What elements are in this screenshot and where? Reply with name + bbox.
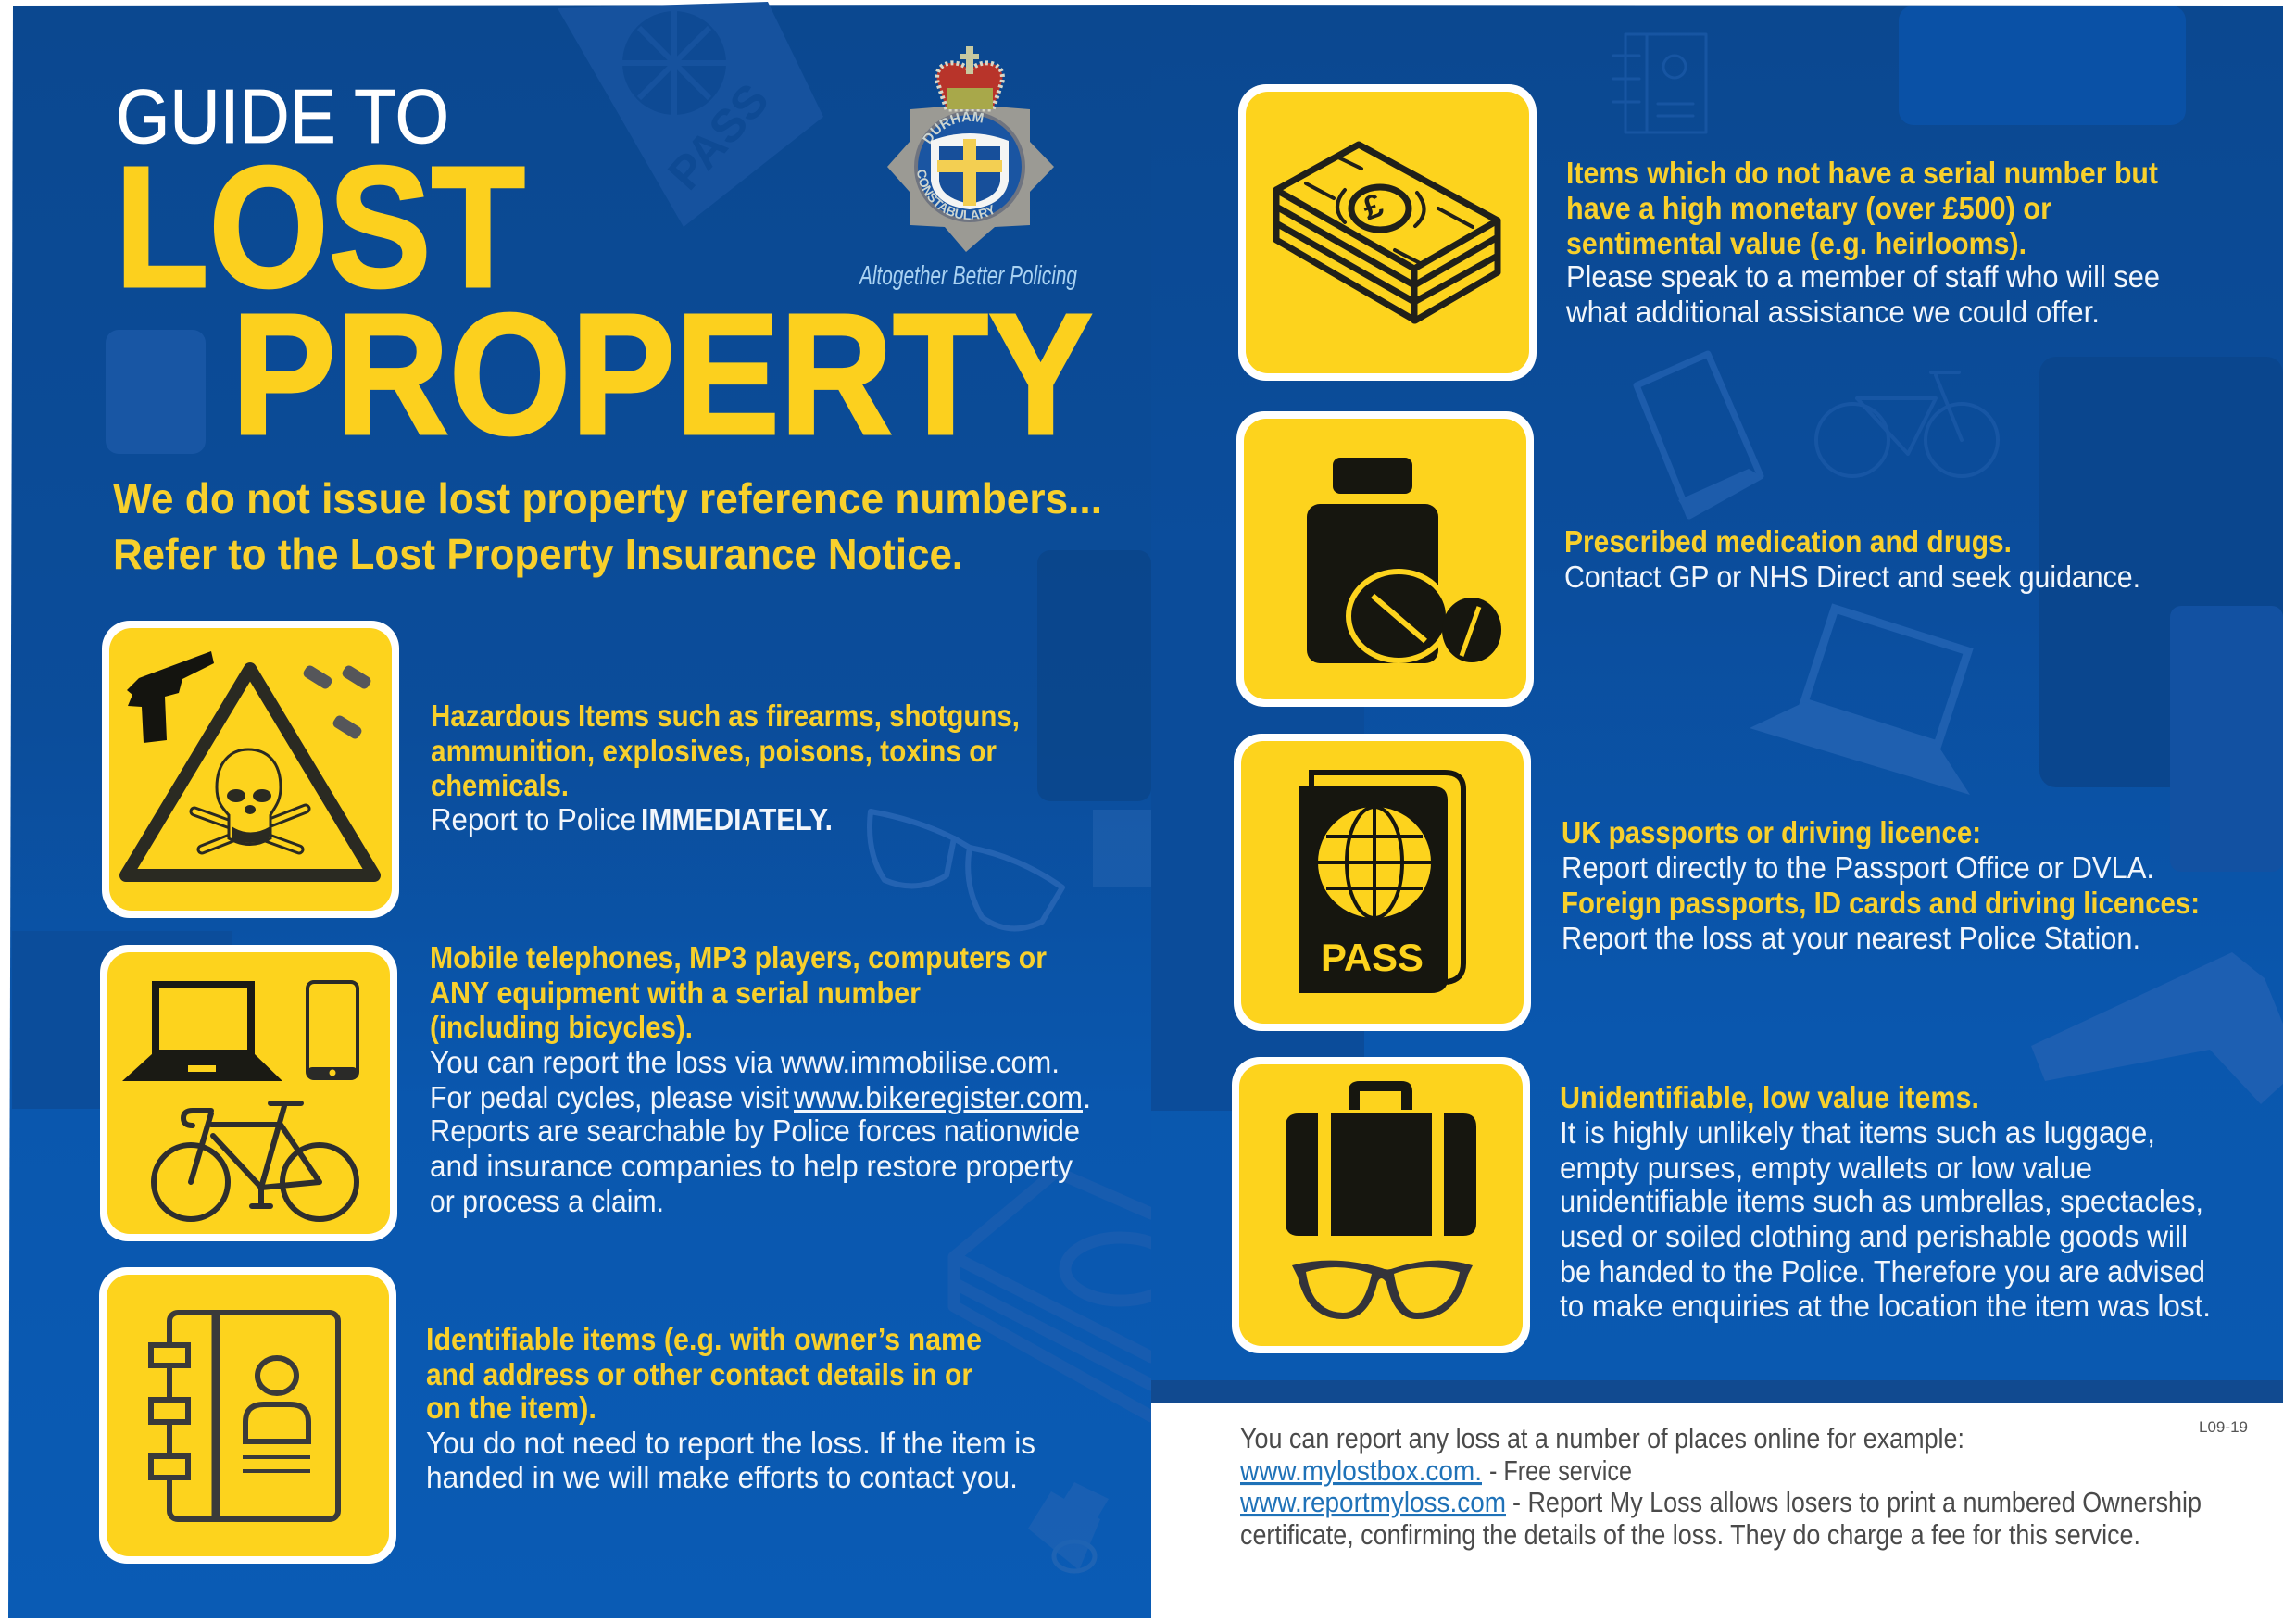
logo: Durham Constabulary crest: CONSTABULARY <box>917 170 993 220</box>
footer: online reporting note <box>1239 1422 2202 1551</box>
banknote stack <box>1276 145 1498 321</box>
icon: background phone <box>1637 354 1761 516</box>
text: high value items: Items which do not have a serial number but <box>1566 156 2158 190</box>
text: identifiable items <box>426 1322 1035 1494</box>
icon tile: electronics and bicycles <box>100 945 397 1241</box>
text: electronics and serial numbers: and insurance companies to help restore property <box>430 1149 1073 1183</box>
laptop <box>122 985 282 1081</box>
title line: property: PROPERTY <box>232 279 1093 471</box>
text: identifiable items: Identifiable items (e.g. with owner’s name <box>426 1322 982 1356</box>
text: low value items <box>1560 1080 2211 1323</box>
footer: online reporting note: www.mylostbox.com. <box>1239 1454 1482 1487</box>
icon: background money stack <box>954 1172 1176 1416</box>
text: passports: Report directly to the Passport Office or DVLA. <box>1562 850 2154 885</box>
passport <box>1311 773 1463 982</box>
icon tile: hazardous items <box>102 621 399 918</box>
spectacles <box>1292 1261 1473 1319</box>
subtitle notice <box>113 474 1102 578</box>
address book <box>151 1313 338 1519</box>
text: electronics and serial numbers: Reports are searchable by Police forces nationwide <box>430 1113 1080 1148</box>
icon: background passport <box>558 2 823 227</box>
text: identifiable items: handed in we will make efforts to contact you. <box>426 1460 1018 1494</box>
crossbones <box>194 809 306 849</box>
text: low value items: unidentifiable items such as umbrellas, spectacles, <box>1560 1184 2203 1218</box>
text: low value items: used or soiled clothing and perishable goods will <box>1560 1219 2188 1253</box>
small tablet <box>1442 598 1501 662</box>
footer: online reporting note: - Report My Loss allows losers to print a numbered Ownership <box>1512 1486 2202 1518</box>
footer: online reporting note: You can report any loss at a number of places online for example: <box>1240 1422 1964 1454</box>
text: high value items: have a high monetary (over £500) or <box>1566 191 2051 225</box>
text: electronics and serial numbers <box>430 940 1091 1218</box>
text: electronics and serial numbers: You can report the loss via www.immobilise.com. <box>430 1045 1060 1079</box>
text: electronics and serial numbers: ANY equipment with a serial number <box>430 975 921 1010</box>
subtitle notice: We do not issue lost property reference numbers... <box>113 474 1102 522</box>
icon: background passport: PASS <box>659 73 779 199</box>
text: medication: Contact GP or NHS Direct and seek guidance. <box>1564 560 2140 594</box>
icon tile: high value items: £ <box>1358 185 1388 228</box>
bullets <box>302 664 372 740</box>
text: high value items <box>1565 156 2160 329</box>
text: identifiable items: You do not need to report the loss. If the item is <box>426 1426 1035 1460</box>
text: passports: Report the loss at your nearest Police Station. <box>1562 921 2140 955</box>
text: hazardous items <box>431 698 1020 837</box>
phone <box>307 982 358 1079</box>
skull <box>217 749 281 845</box>
title line: lost: LOST <box>115 132 525 323</box>
logo strapline: Altogether Better Policing <box>859 261 1077 291</box>
globe <box>1318 807 1431 918</box>
panel: right page background <box>1151 5 2283 1403</box>
icon tile: passports <box>1234 734 1531 1031</box>
text: passports <box>1562 815 2200 955</box>
panel: left page background <box>8 5 1151 1618</box>
text: identifiable items: on the item). <box>426 1390 596 1425</box>
text: identifiable items: and address or other contact details in or <box>426 1357 972 1391</box>
text: hazardous items: IMMEDIATELY. <box>641 802 833 837</box>
text: electronics and serial numbers: . <box>1083 1080 1091 1114</box>
text: passports: Foreign passports, ID cards and driving licences: <box>1562 886 2200 920</box>
icon: background address book <box>1613 34 1706 132</box>
footer: online reporting note: - Free service <box>1489 1454 1632 1487</box>
document reference code: L09-19 <box>2199 1418 2248 1436</box>
text: electronics and serial numbers: or process a claim. <box>430 1184 664 1218</box>
text: low value items: It is highly unlikely that items such as luggage, <box>1560 1115 2155 1150</box>
footer: online reporting note: certificate, confirming the details of the loss. They do charge a fee for this service. <box>1240 1518 2140 1551</box>
footer: online reporting note: www.reportmyloss.com <box>1239 1486 1506 1518</box>
title <box>115 73 1093 471</box>
text: low value items: to make enquiries at the location the item was lost. <box>1560 1289 2211 1323</box>
text: electronics and serial numbers: Mobile telephones, MP3 players, computers or <box>430 940 1047 975</box>
text: low value items: Unidentifiable, low value items. <box>1560 1080 1979 1114</box>
text: low value items: be handed to the Police. Therefore you are advised <box>1560 1254 2205 1289</box>
text: hazardous items: ammunition, explosives, poisons, toxins or <box>431 734 997 768</box>
suitcase <box>1286 1081 1476 1236</box>
icon tile: identifiable items <box>99 1267 396 1564</box>
pill bottle <box>1333 458 1412 494</box>
logo: Durham Constabulary crest <box>887 46 1054 252</box>
title line: guide to: GUIDE TO <box>116 73 449 159</box>
text: high value items: sentimental value (e.g. heirlooms). <box>1566 226 2026 260</box>
text: medication: Prescribed medication and drugs. <box>1564 524 2012 559</box>
icon: background laptop <box>1750 609 1970 795</box>
text: high value items: what additional assistance we could offer. <box>1565 295 2100 329</box>
hazard triangle <box>126 669 374 875</box>
subtitle notice: Refer to the Lost Property Insurance Notice. <box>113 530 963 578</box>
icon: background bicycle <box>1816 372 1998 476</box>
icon tile: high value items <box>1238 84 1537 381</box>
icon: background pill bottle <box>1028 1482 1109 1571</box>
icon tile: passports: PASS <box>1321 936 1424 979</box>
bicycle <box>154 1103 357 1219</box>
text: hazardous items: Hazardous Items such as firearms, shotguns, <box>431 698 1020 733</box>
text: high value items: Please speak to a member of staff who will see <box>1566 259 2160 294</box>
icon tile: medication <box>1236 411 1534 707</box>
icon tile: low value items <box>1232 1057 1530 1353</box>
handgun <box>127 651 214 743</box>
large tablet <box>1349 572 1449 661</box>
icon: background handgun <box>2031 952 2283 1104</box>
text: electronics and serial numbers: For pedal cycles, please visit <box>430 1080 789 1114</box>
icon: background glasses <box>870 812 1062 928</box>
logo: Durham Constabulary crest: DURHAM <box>922 111 984 145</box>
text: electronics and serial numbers: (including bicycles). <box>430 1010 693 1044</box>
text: medication <box>1564 524 2140 594</box>
text: hazardous items: Report to Police <box>431 802 636 837</box>
text: low value items: empty purses, empty wallets or low value <box>1560 1151 2092 1185</box>
text: electronics and serial numbers: www.bikeregister.com <box>793 1080 1083 1114</box>
text: hazardous items: chemicals. <box>431 768 569 802</box>
text: passports: UK passports or driving licence: <box>1562 815 1981 849</box>
